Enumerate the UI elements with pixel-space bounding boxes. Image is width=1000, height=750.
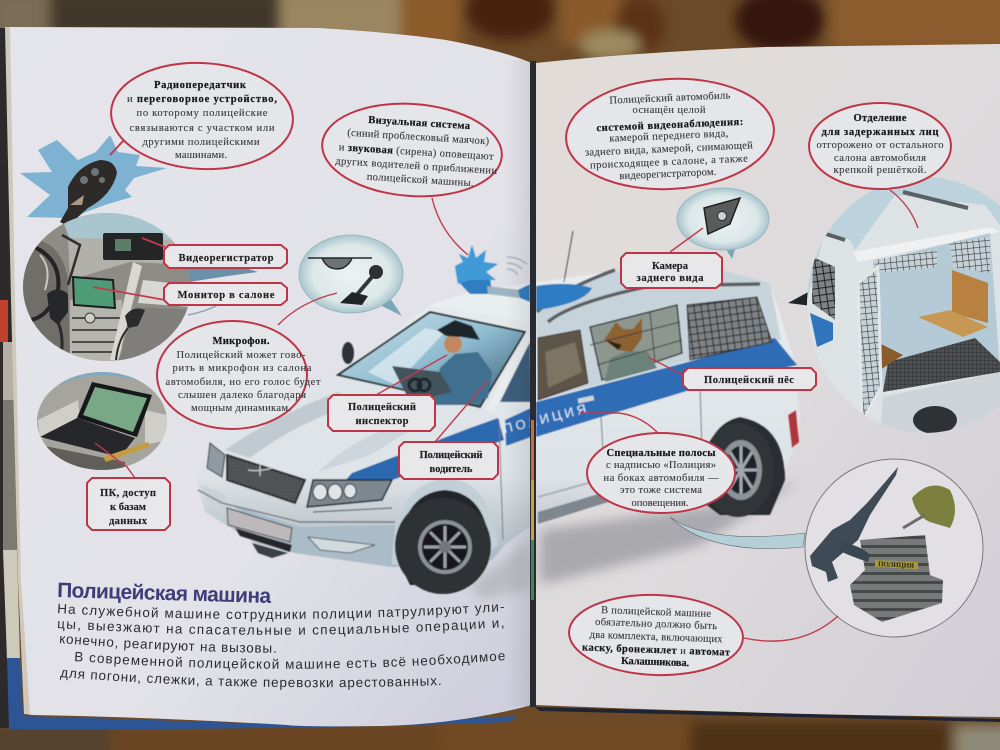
rifle (810, 467, 898, 582)
side grid window (812, 257, 835, 320)
callout: equipment: Калашникова. (621, 656, 690, 669)
rear roof (536, 270, 781, 400)
arrow: compartment (890, 190, 918, 228)
callout: radio: другими полицейскими (142, 137, 260, 148)
arrow: stripes (580, 413, 658, 433)
police dog (604, 318, 657, 382)
window bars (590, 312, 682, 365)
arrow: laptop (95, 443, 135, 478)
inset: rear camera bubble (677, 188, 769, 259)
callout: compartment: отгорожено от остального (816, 140, 944, 151)
body text: На служебной машине сотрудники полиции патрулируют ули- (58, 604, 504, 622)
headlight (307, 480, 392, 507)
front fender (392, 478, 498, 565)
blue flash star (455, 245, 498, 284)
dog window (590, 305, 682, 380)
label: police dog: Полицейский пёс (704, 375, 794, 386)
body text: для погони, слежки, а также перевозки арестованных. (60, 670, 440, 690)
callout: microphone: Микрофон. (212, 336, 270, 347)
label: rear camera: Камера (652, 261, 689, 272)
small left headlight (207, 443, 225, 477)
floor (883, 338, 1000, 392)
callout: visual system (319, 98, 505, 202)
car body (197, 270, 800, 567)
label: PC (87, 478, 170, 530)
antenna (564, 231, 573, 282)
callout: visual system: (синий проблесковый маячок) (347, 128, 490, 147)
fog light (308, 537, 375, 553)
label: inspector: инспектор (356, 416, 409, 427)
paper sticker (138, 280, 190, 307)
callout: stripes: на боках автомобиля — (604, 473, 719, 484)
arrow: microphone (278, 293, 337, 325)
label: police dog (683, 368, 816, 390)
body text: конечно, реагируют на вызовы. (60, 636, 276, 653)
callout: radio: машинами. (175, 150, 227, 161)
front wheel (395, 498, 491, 594)
roof above windscreen (430, 290, 530, 322)
interior grids (873, 250, 937, 273)
side blue stripe (810, 313, 833, 347)
arrow: monitor (93, 287, 165, 300)
callout: radio: и переговорное устройство, (127, 94, 277, 105)
driver (392, 320, 492, 405)
bumper (881, 372, 1000, 433)
cabin monitor (73, 277, 115, 308)
wooden seat (952, 270, 988, 323)
door handle (578, 395, 594, 404)
gutter (505, 60, 536, 707)
left page stack edge (5, 27, 30, 714)
police lettering: ПОЛИЦИЯ (502, 401, 589, 436)
label: PC: ПК, доступ (100, 488, 156, 499)
siren waves (507, 257, 527, 275)
bumper shading (232, 505, 395, 567)
callout: microphone: слышен далеко благодаря (178, 390, 306, 401)
plate slots (235, 528, 292, 552)
bumper line (198, 490, 395, 522)
callout: video surveillance: Полицейский автомобиль (609, 90, 731, 107)
right panel (118, 307, 190, 362)
callout: compartment: для задержанных лиц (822, 127, 938, 138)
video recorder box (103, 233, 163, 260)
left page (9, 27, 533, 726)
underbody (252, 543, 288, 558)
callout: visual system: Визуальная система (368, 115, 471, 132)
inset: laptop bubble (37, 372, 167, 470)
helmet (912, 486, 955, 528)
callout: microphone: автомобиля, но его голос будет (166, 377, 321, 388)
label: driver (399, 442, 498, 479)
label: monitor (164, 283, 287, 305)
body text: цы, выезжают на спасательные и специальные операции и, (58, 620, 504, 637)
open door (858, 267, 881, 422)
inset: prisoner compartment (788, 177, 1000, 440)
label: inspector: Полицейский (348, 402, 416, 413)
grille (227, 455, 305, 503)
body text (58, 604, 505, 690)
callout: stripes: оповещения. (632, 498, 688, 509)
callout: video surveillance: видеорегистратором. (619, 167, 717, 182)
arrow: visual system (432, 198, 468, 255)
inset: radio handset star (20, 135, 167, 226)
a pillar (486, 330, 531, 412)
callout: video surveillance: системой видеонаблюдения: (596, 117, 744, 134)
grille emblem (248, 465, 272, 476)
callout: microphone: мощным динамикам. (191, 403, 291, 414)
front wheel arch (398, 490, 490, 585)
callout: video surveillance: заднего вида, камерой, снимающей (585, 140, 753, 159)
front door glass (500, 342, 531, 402)
callout: stripes: это тоже система (620, 485, 702, 496)
label: monitor: Монитор в салоне (178, 290, 275, 301)
callout: stripes: Специальные полосы (606, 448, 716, 459)
inset: equipment (805, 459, 983, 637)
roof rails (537, 270, 760, 322)
inset: equipment: ПОЛИЦИЯ (878, 560, 914, 570)
callout: radio: Радиопередатчик (154, 80, 247, 91)
arrow: rear camera (670, 228, 703, 252)
lower sill (538, 470, 704, 524)
console (70, 300, 122, 362)
label: PC: данных (109, 516, 148, 527)
bulletproof vest (850, 535, 943, 622)
arrow: inspector (376, 355, 447, 395)
inset: car dashboard (23, 213, 191, 361)
blue stripe hood (345, 418, 504, 481)
rear grid window (687, 297, 772, 360)
label: driver: Полицейский (420, 450, 482, 461)
arrow: equipment (744, 616, 838, 641)
callout: visual system: других водителей о приближении (335, 156, 498, 177)
front side window (538, 330, 588, 400)
microphones (47, 290, 68, 325)
arrow: radio (110, 140, 124, 155)
arrow: dog (648, 357, 683, 375)
right page (535, 44, 1000, 717)
label: driver: водитель (430, 464, 473, 475)
callout: visual system: полицейской машины. (366, 172, 474, 189)
label: inspector (328, 395, 435, 431)
callout: microphone (157, 321, 321, 429)
callout: compartment: Отделение (854, 113, 907, 124)
rear light (788, 410, 799, 448)
hood (213, 375, 502, 477)
police car illustration (197, 231, 800, 594)
callout: stripes: с надписью «Полиция» (606, 460, 716, 471)
callout: video surveillance: камерой переднего вида, (609, 128, 729, 145)
callout: radio (108, 58, 296, 174)
title: Полицейская машина (57, 579, 272, 608)
callout: equipment (568, 592, 744, 678)
body text: В современной полицейской машине есть всё необходимое (75, 652, 505, 671)
blue stripe door (505, 408, 531, 446)
callout: compartment: крепкой решёткой. (834, 165, 926, 176)
callout: stripes (587, 433, 735, 513)
blue stripe side (536, 338, 797, 437)
callout: equipment: В полицейской машине (601, 605, 712, 620)
windshield (338, 312, 525, 407)
callout: compartment (809, 103, 951, 189)
label: video recorder (164, 245, 287, 268)
tail: equipment bubble (670, 517, 805, 549)
arrow: recorder (142, 238, 165, 247)
inset: microphone bubble (299, 235, 403, 316)
rear wheel arch (700, 417, 785, 515)
callout: video surveillance: происходящее в салоне, а также (590, 154, 748, 171)
rear wheel (702, 423, 774, 517)
roof rail (823, 192, 968, 240)
callout: compartment: салона автомобиля (834, 153, 926, 164)
side mirror (342, 342, 354, 364)
callout: equipment: каску, бронежилет и автомат (582, 642, 731, 659)
pillar (110, 262, 142, 360)
dog box (881, 344, 903, 369)
arrow: driver (435, 380, 488, 442)
callout: equipment: два комплекта, включающих (589, 630, 723, 645)
callout: radio: по которому полицейские (136, 108, 268, 119)
label: PC: к базам (110, 502, 146, 513)
callout: radio: связываются с участком или (130, 123, 275, 134)
label: rear camera: заднего вида (636, 273, 704, 284)
callout: microphone: рить в микрофон из салона (172, 363, 312, 374)
label: video recorder: Видеорегистратор (178, 253, 274, 264)
door lines (499, 387, 702, 540)
callout: video surveillance: оснащён целой (632, 105, 706, 116)
callout: microphone: Полицейский может гово- (176, 350, 306, 361)
dash tail (186, 262, 258, 282)
callout: equipment: обязательно должно быть (595, 617, 717, 632)
car ground shadow (470, 480, 800, 600)
callout: video surveillance (563, 74, 777, 194)
callout: visual system: и звуковая (сирена) оповещают (338, 142, 494, 163)
license plate (227, 508, 292, 542)
label: rear camera (621, 253, 722, 288)
light bar (457, 278, 592, 310)
